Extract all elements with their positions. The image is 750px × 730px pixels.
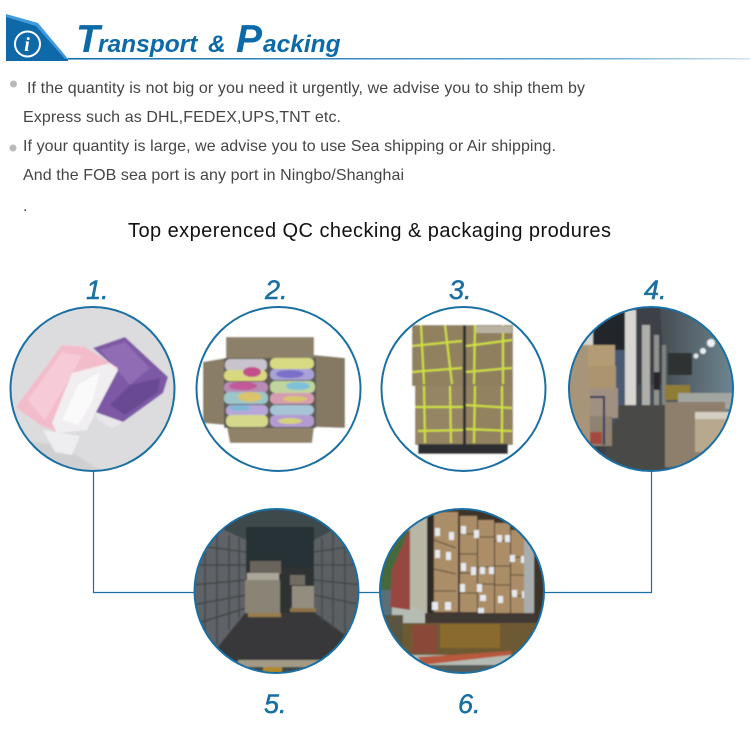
- intro text block: [10, 80, 585, 215]
- step 4 photo: warehouse interior: [566, 305, 736, 475]
- intro text block: Express such as DHL,FEDEX,UPS,TNT etc.: [23, 109, 341, 126]
- title: P: [236, 18, 263, 61]
- step 2 photo: open carton with tie-dye bags: [202, 336, 346, 444]
- step 1 photo: bagged pink and purple items: [8, 305, 178, 475]
- intro text block: .: [23, 198, 27, 215]
- step 6 number: 6.: [458, 689, 481, 719]
- bullet: [10, 144, 16, 152]
- intro text block: If your quantity is large, we advise you to use Sea shipping or Air shipping.: [23, 138, 556, 155]
- step 1 number: 1.: [86, 275, 109, 305]
- step 2 number: 2.: [264, 275, 288, 305]
- icon: info badge: [6, 14, 68, 61]
- step 3 photo: strapped cartons on pallet: [411, 324, 514, 455]
- header banner: [6, 14, 750, 61]
- title: T: [76, 18, 103, 61]
- title: ransport: [98, 31, 198, 58]
- bullet: [10, 80, 17, 88]
- step 5 number: 5.: [264, 689, 287, 719]
- step 5 photo: container interior with pallets: [192, 506, 362, 676]
- connector lines: [94, 471, 652, 592]
- icon: info badge: i: [24, 34, 30, 56]
- title: &: [208, 31, 226, 58]
- step 3 number: 3.: [449, 275, 472, 305]
- step 4 number: 4.: [644, 275, 667, 305]
- intro text block: If the quantity is not big or you need it urgently, we advise you to ship them by: [27, 80, 585, 97]
- intro text block: And the FOB sea port is any port in Ningbo/Shanghai: [23, 167, 404, 184]
- section heading: Top experenced QC checking & packaging produres: [128, 220, 611, 242]
- title: acking: [263, 31, 341, 58]
- step 6 photo: loaded truck container: [378, 506, 548, 676]
